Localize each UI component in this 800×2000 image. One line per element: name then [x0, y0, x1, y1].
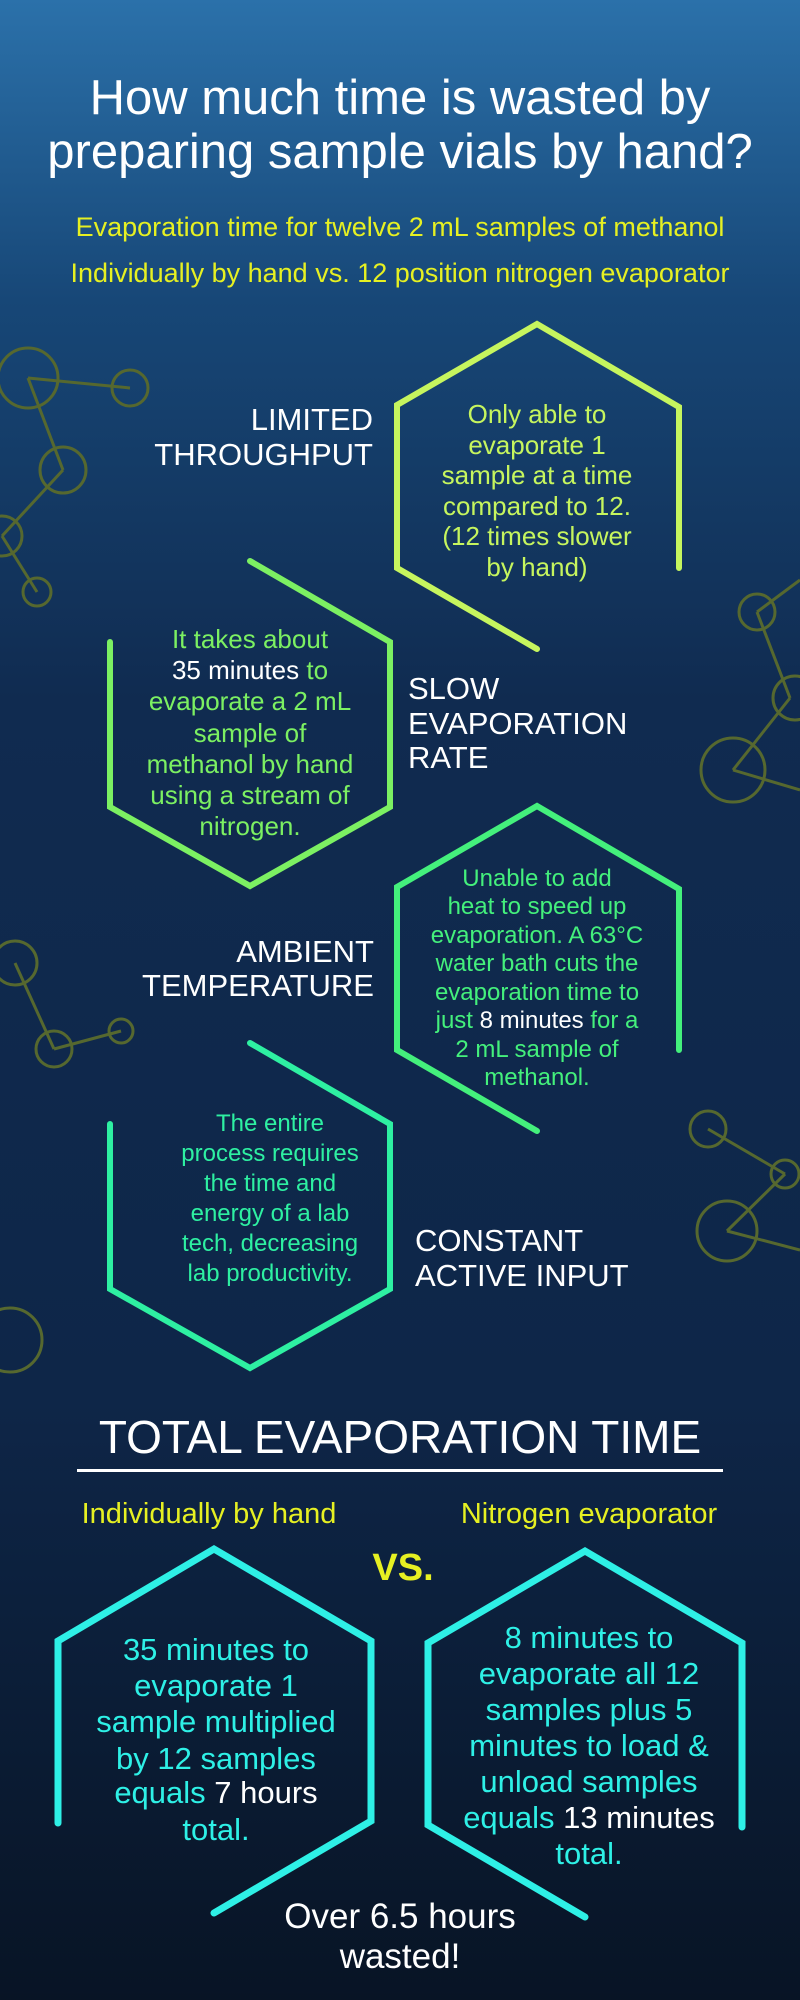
- panel: nitrogen evaporator total: 8 minutes to: [505, 1620, 673, 1655]
- subtitle: Evaporation time for twelve 2 mL samples of methanol: [76, 212, 724, 242]
- panel: limited throughput: evaporate 1: [468, 430, 606, 460]
- panel: constant active input: ACTIVE INPUT: [415, 1258, 629, 1293]
- panel: slow evaporation rate: RATE: [408, 740, 488, 775]
- panel: limited throughput: Only able to: [468, 399, 606, 429]
- panel: slow evaporation rate: sample of: [194, 718, 307, 748]
- panel: nitrogen evaporator total: samples plus 5: [486, 1692, 692, 1727]
- panel: slow evaporation rate: 35 minutes to: [172, 655, 328, 685]
- column labels: Nitrogen evaporator: [461, 1498, 717, 1530]
- panel: ambient temperature: [142, 806, 679, 1131]
- panel: constant active input: lab productivity.: [188, 1260, 352, 1287]
- title: preparing sample vials by hand?: [47, 125, 753, 179]
- panel: constant active input: energy of a lab: [191, 1200, 349, 1227]
- panel: slow evaporation rate: EVAPORATION: [408, 706, 627, 741]
- panel: constant active input: The entire: [216, 1110, 324, 1137]
- panel: slow evaporation rate: methanol by hand: [147, 749, 353, 779]
- column labels: Individually by hand: [82, 1498, 336, 1530]
- title: [47, 71, 753, 179]
- panel: by hand total: 35 minutes to: [123, 1632, 309, 1667]
- panel: slow evaporation rate: SLOW: [408, 671, 500, 706]
- panel: limited throughput: THROUGHPUT: [154, 437, 373, 472]
- callout: hours wasted: Over 6.5 hours: [284, 1897, 516, 1936]
- panel: constant active input: [110, 1043, 629, 1368]
- panel: limited throughput: sample at a time: [442, 460, 632, 490]
- panel: limited throughput: [154, 324, 679, 649]
- subtitle: Individually by hand vs. 12 position nitrogen evaporator: [71, 258, 729, 288]
- panel: limited throughput: compared to 12.: [443, 491, 631, 521]
- heading: total evaporation time: TOTAL EVAPORATION TIME: [99, 1411, 701, 1463]
- panel: ambient temperature: methanol.: [484, 1064, 590, 1091]
- panel: by hand total: evaporate 1: [134, 1668, 298, 1703]
- panel: nitrogen evaporator total: total.: [555, 1836, 623, 1871]
- panel: by hand total: total.: [182, 1812, 250, 1847]
- panel: constant active input: CONSTANT: [415, 1223, 583, 1258]
- panel: ambient temperature: AMBIENT: [236, 934, 374, 969]
- callout: hours wasted: wasted!: [339, 1937, 460, 1976]
- panel: slow evaporation rate: [110, 561, 627, 886]
- panel: by hand total: sample multiplied: [96, 1704, 336, 1739]
- panel: ambient temperature: evaporation time to: [435, 979, 639, 1006]
- panel: by hand total: [58, 1549, 371, 1913]
- panel: slow evaporation rate: It takes about: [172, 624, 329, 654]
- panel: nitrogen evaporator total: equals 13 minutes: [463, 1800, 715, 1835]
- panel: nitrogen evaporator total: minutes to load &: [469, 1728, 709, 1763]
- decorative molecules: [0, 348, 800, 1372]
- panel: limited throughput: LIMITED: [251, 402, 373, 437]
- panel: limited throughput: by hand): [486, 552, 588, 582]
- panel: limited throughput: (12 times slower: [442, 521, 632, 551]
- panel: nitrogen evaporator total: evaporate all 12: [479, 1656, 699, 1691]
- panel: ambient temperature: evaporation. A 63°C: [431, 922, 643, 949]
- callout: hours wasted: [284, 1897, 516, 1976]
- panel: ambient temperature: just 8 minutes for a: [435, 1007, 639, 1034]
- column labels: [82, 1498, 717, 1589]
- title: How much time is wasted by: [90, 71, 711, 125]
- panel: by hand total: by 12 samples: [116, 1741, 316, 1776]
- panel: constant active input: the time and: [204, 1170, 336, 1197]
- panel: constant active input: tech, decreasing: [182, 1230, 358, 1257]
- panel: ambient temperature: TEMPERATURE: [142, 968, 374, 1003]
- panel: slow evaporation rate: evaporate a 2 mL: [149, 686, 351, 716]
- panel: ambient temperature: 2 mL sample of: [455, 1036, 619, 1063]
- panel: ambient temperature: heat to speed up: [448, 893, 626, 920]
- panel: slow evaporation rate: using a stream of: [150, 780, 350, 810]
- panel: by hand total: equals 7 hours: [114, 1775, 318, 1810]
- panel: nitrogen evaporator total: unload samples: [480, 1764, 698, 1799]
- panel: slow evaporation rate: nitrogen.: [199, 811, 301, 841]
- panel: constant active input: process requires: [181, 1140, 359, 1167]
- panel: ambient temperature: water bath cuts the: [435, 950, 638, 977]
- panel: nitrogen evaporator total: [428, 1551, 742, 1917]
- column labels: VS.: [372, 1547, 434, 1589]
- panel: ambient temperature: Unable to add: [462, 865, 612, 892]
- subtitle: [71, 212, 729, 288]
